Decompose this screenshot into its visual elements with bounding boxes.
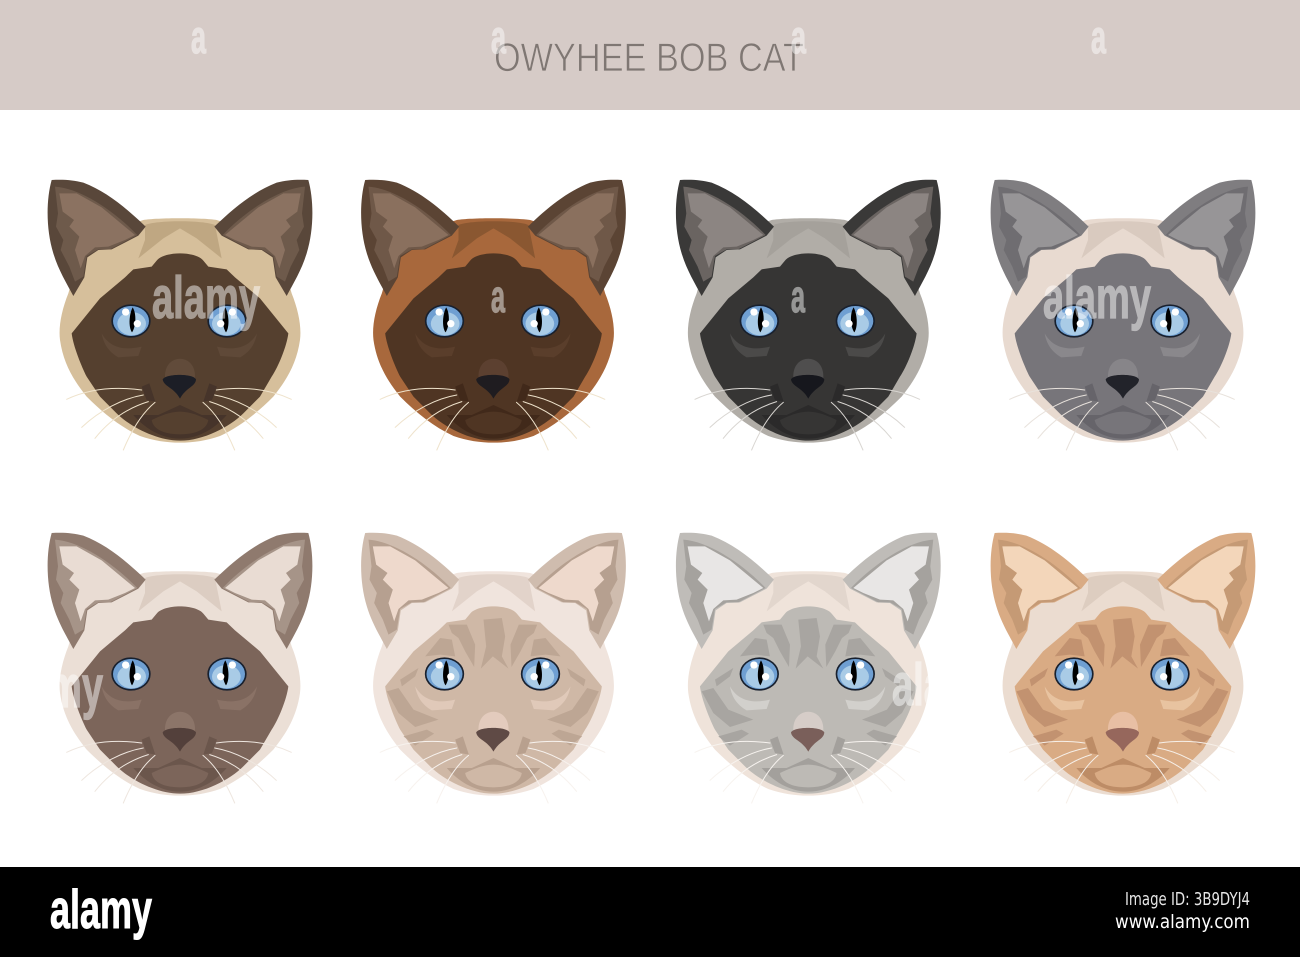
ears <box>676 533 941 649</box>
ears <box>991 533 1255 649</box>
eyes <box>1054 304 1190 338</box>
whiskers <box>380 741 605 803</box>
eyes <box>740 657 875 691</box>
face mask <box>1015 606 1231 794</box>
face mask <box>72 253 288 441</box>
eyes <box>111 657 247 691</box>
cat: chocolate point <box>361 180 626 450</box>
muzzle <box>102 333 257 439</box>
nose <box>476 728 509 752</box>
whiskers <box>1010 741 1234 803</box>
muzzle <box>730 333 885 439</box>
image id: Image ID: 3B9DYJ4 <box>1125 889 1250 910</box>
whiskers <box>380 388 605 450</box>
face mask <box>700 606 917 794</box>
nose <box>1106 728 1139 752</box>
muzzle <box>730 686 885 792</box>
cat: silver tabby point <box>676 533 941 803</box>
footer logo: alamy <box>50 878 152 940</box>
website: www.alamy.com <box>1115 911 1250 933</box>
watermarks: a <box>491 11 506 63</box>
face mask <box>385 253 602 441</box>
watermarks: a <box>191 11 206 63</box>
watermarks <box>0 11 1151 720</box>
tabby stripes <box>1016 618 1228 746</box>
eyes <box>740 304 875 338</box>
head fur <box>373 571 614 796</box>
eyes <box>1054 657 1190 691</box>
nose <box>1106 375 1139 399</box>
cat: lilac chocolate point <box>48 533 312 803</box>
watermarks: alamy <box>0 654 103 720</box>
muzzle <box>1045 686 1200 792</box>
muzzle <box>415 333 570 439</box>
muzzle <box>1045 333 1200 439</box>
title: OWYHEE BOB CAT <box>494 36 804 80</box>
nose <box>476 375 509 399</box>
head fur <box>688 571 929 796</box>
eyes <box>111 304 247 338</box>
muzzle <box>102 686 257 792</box>
cat: black point <box>676 180 941 450</box>
eyes <box>425 304 560 338</box>
cat: seal point <box>48 180 312 450</box>
whiskers <box>67 388 291 450</box>
whiskers <box>695 741 920 803</box>
ears <box>361 533 626 649</box>
muzzle <box>415 686 570 792</box>
face mask <box>1015 253 1231 441</box>
nose <box>791 728 824 752</box>
watermarks: alamy <box>892 652 1000 718</box>
face mask <box>385 606 602 794</box>
ears <box>48 533 312 649</box>
whiskers <box>695 388 920 450</box>
whiskers <box>1010 388 1234 450</box>
tabby stripes <box>702 618 914 746</box>
footer bar <box>0 867 1300 957</box>
face mask <box>700 253 917 441</box>
face mask <box>72 606 288 794</box>
watermarks: a <box>791 271 806 322</box>
cat: red tabby point <box>991 533 1255 803</box>
tabby stripes <box>387 618 599 746</box>
watermarks: alamy <box>1043 265 1151 331</box>
ears <box>361 180 626 296</box>
cat: blue point <box>991 180 1255 450</box>
eyes <box>425 657 560 691</box>
whiskers <box>67 741 291 803</box>
watermarks: alamy <box>152 265 260 331</box>
head fur <box>373 218 614 443</box>
head fur <box>60 218 300 443</box>
watermarks: a <box>791 11 806 63</box>
head fur <box>1003 571 1243 796</box>
nose <box>163 375 196 399</box>
nose <box>163 728 196 752</box>
ears <box>676 180 941 296</box>
watermarks: a <box>1091 11 1106 63</box>
nose <box>791 375 824 399</box>
header band <box>0 0 1300 110</box>
cat: cream tabby point <box>361 533 626 803</box>
head fur <box>60 571 300 796</box>
ears <box>991 180 1255 296</box>
watermarks: a <box>491 271 506 322</box>
head fur <box>688 218 929 443</box>
head fur <box>1003 218 1243 443</box>
ears <box>48 180 312 296</box>
